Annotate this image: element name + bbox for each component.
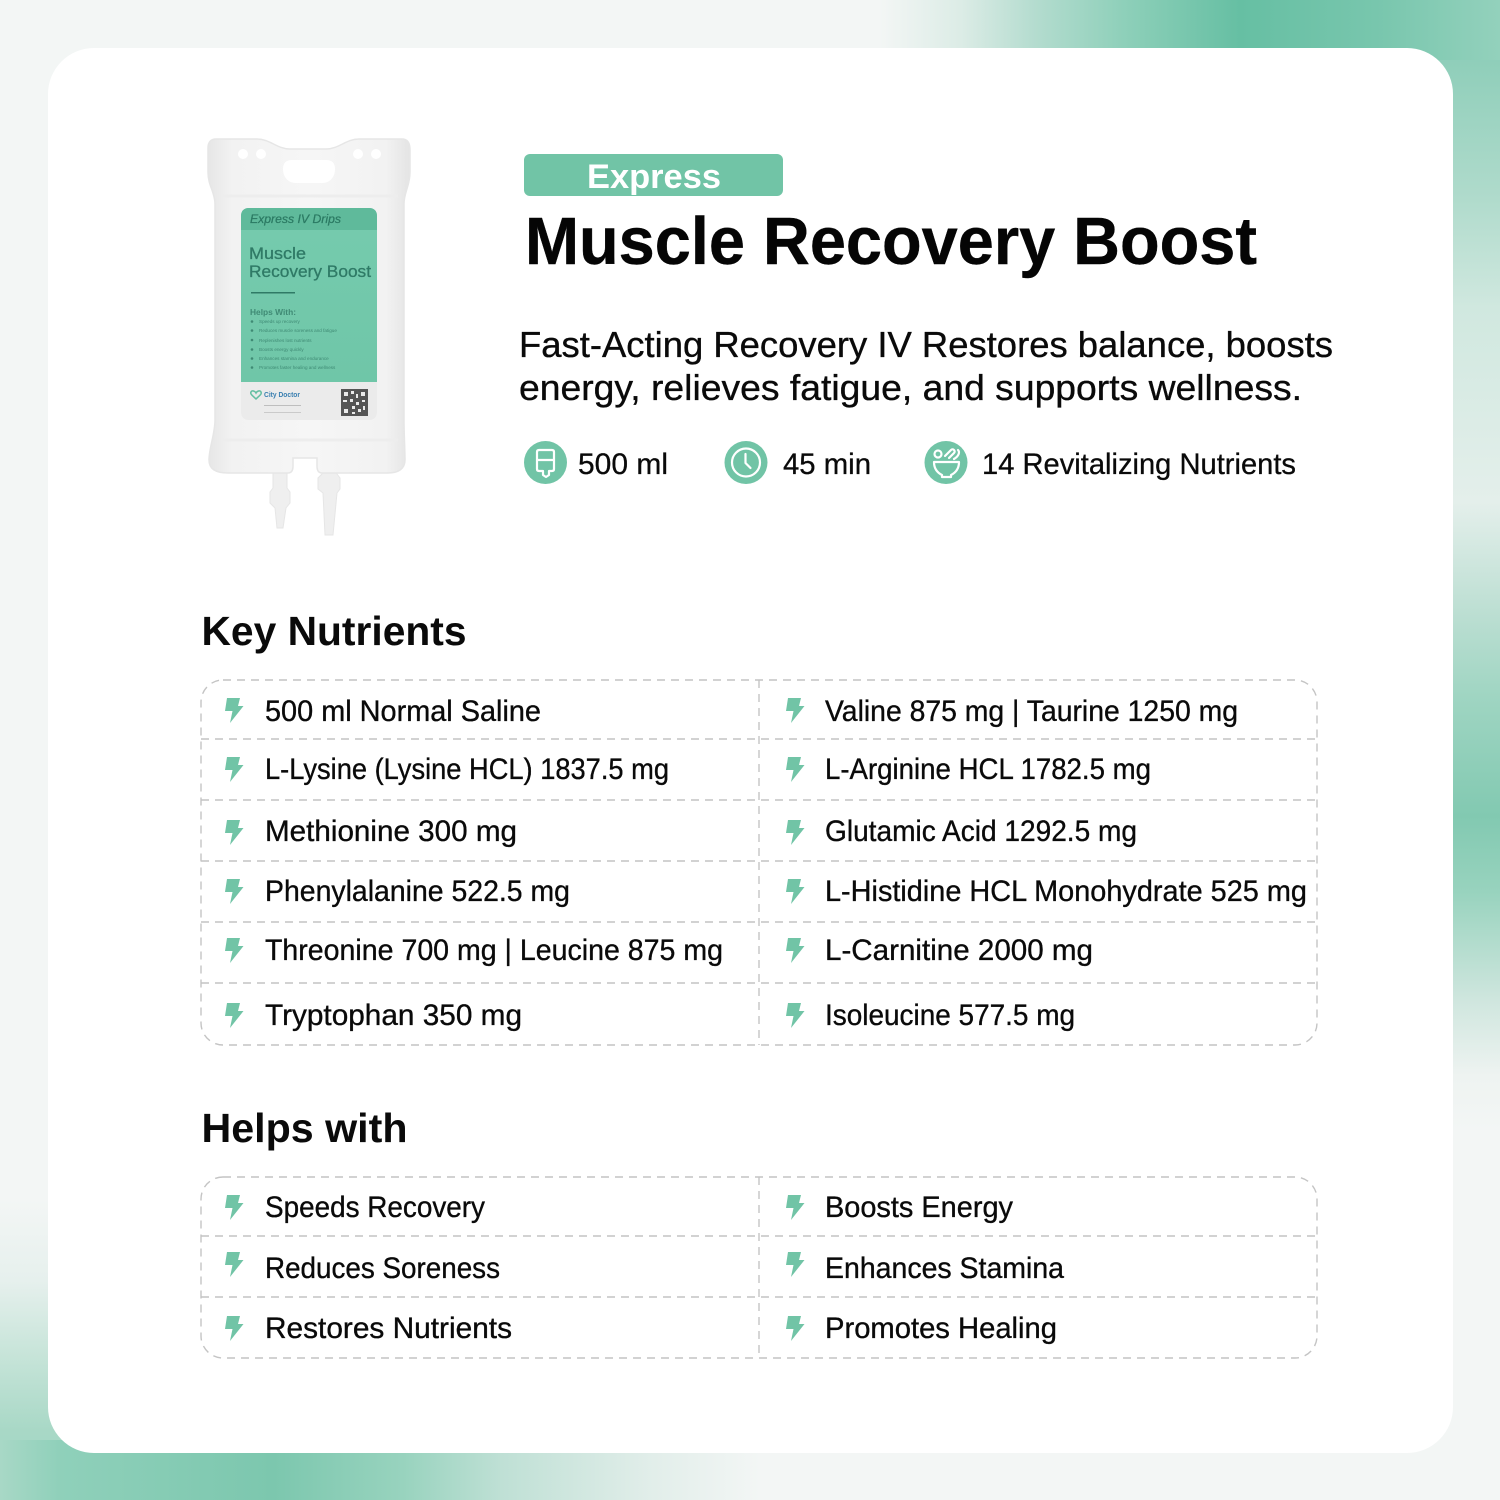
bag label: Promotes faster healing and wellness (259, 365, 336, 370)
nutrient list right: Isoleucine 577.5 mg (825, 999, 1075, 1032)
nutrient list left: Threonine 700 mg | Leucine 875 mg (265, 934, 723, 967)
nutrient list right: Valine 875 mg | Taurine 1250 mg (825, 695, 1238, 728)
nutrient list right: L-Arginine HCL 1782.5 mg (825, 753, 1151, 786)
bag label: Helps With: (250, 307, 296, 317)
bag body (208, 139, 410, 473)
nutrient list left: Methionine 300 mg (265, 815, 517, 848)
description (519, 324, 1333, 408)
bolt icons (225, 698, 804, 1028)
icon: bowl (924, 441, 968, 484)
icon: clock (724, 441, 768, 484)
IV bag illustration (208, 139, 410, 535)
bag label: Reduces muscle soreness and fatigue (259, 328, 337, 333)
stat: nutrients: 14 Revitalizing Nutrients (982, 448, 1296, 481)
benefits right (825, 1191, 1064, 1345)
nutrient list left: Phenylalanine 522.5 mg (265, 875, 570, 908)
benefits left: Restores Nutrients (265, 1312, 512, 1345)
nutrient list left: Tryptophan 350 mg (265, 999, 522, 1032)
badge: Express: Express (587, 158, 721, 196)
bag hanger holes (238, 149, 381, 183)
table: key nutrients (201, 680, 1317, 1045)
bag label: Express IV Drips (250, 212, 341, 226)
bag label: Speeds up recovery (259, 319, 301, 324)
bag tubes (270, 458, 340, 535)
benefits left: Speeds Recovery (265, 1191, 485, 1224)
benefits right: Enhances Stamina (825, 1252, 1064, 1285)
stat: duration: 45 min (783, 448, 871, 481)
heading: Helps with: Helps with (202, 1105, 408, 1151)
bag label (241, 208, 377, 420)
nutrient list right: L-Carnitine 2000 mg (825, 934, 1093, 967)
heading: Key Nutrients: Key Nutrients (202, 608, 466, 654)
nutrient list right: L-Histidine HCL Monohydrate 525 mg (825, 875, 1307, 908)
nutrient list left: L-Lysine (Lysine HCL) 1837.5 mg (265, 753, 669, 786)
bolt icons (225, 1195, 804, 1341)
bag label: Boosts energy quickly (259, 347, 304, 352)
benefits right: Boosts Energy (825, 1191, 1013, 1224)
benefits left (265, 1191, 512, 1345)
table: helps with (201, 1177, 1317, 1358)
benefits right: Promotes Healing (825, 1312, 1057, 1345)
badge: Express (524, 154, 783, 196)
title: Muscle Recovery Boost (525, 204, 1257, 279)
bag label: Replenishes lost nutrients (259, 338, 312, 343)
description: energy, relieves fatigue, and supports wellness. (519, 367, 1302, 408)
stat: volume (524, 441, 668, 484)
description: Fast-Acting Recovery IV Restores balance, boosts (519, 324, 1333, 365)
nutrient list left: 500 ml Normal Saline (265, 695, 541, 728)
bag label: Recovery Boost (249, 263, 371, 281)
benefits left: Reduces Soreness (265, 1252, 500, 1285)
bag label: Muscle (249, 245, 306, 263)
bag label: City Doctor (264, 392, 300, 399)
stat: nutrients (924, 441, 1296, 484)
icon: IV bag (524, 441, 567, 484)
stat: duration (724, 441, 871, 484)
nutrient list left (265, 695, 723, 1032)
nutrient list right (825, 695, 1307, 1032)
nutrient list right: Glutamic Acid 1292.5 mg (825, 815, 1137, 848)
stat: volume: 500 ml (578, 448, 668, 481)
bag label: Enhances stamina and endurance (259, 356, 329, 361)
